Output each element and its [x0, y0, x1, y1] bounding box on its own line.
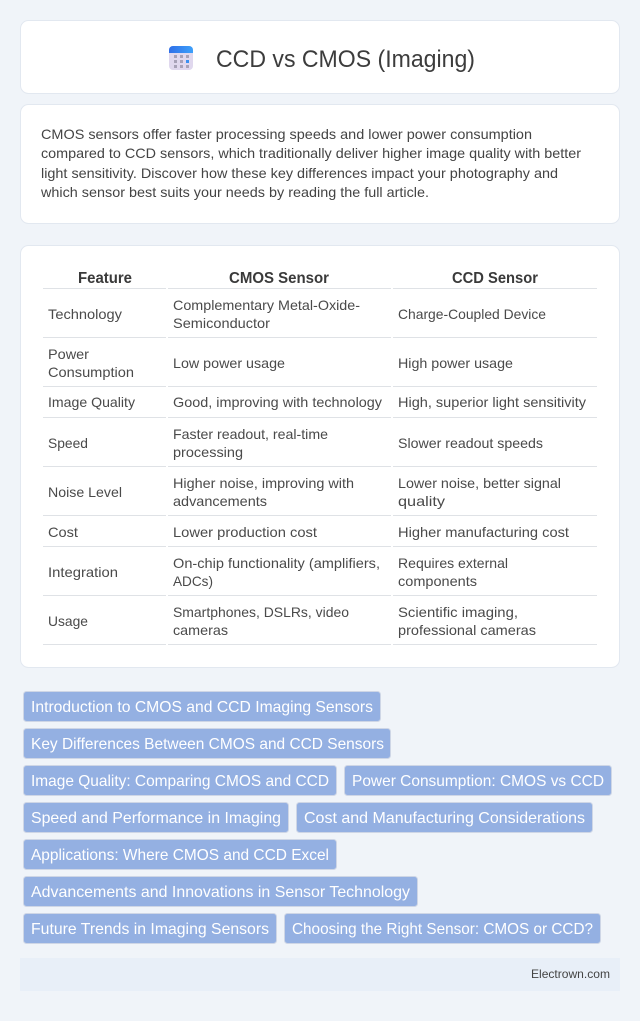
intro text: light sensitivity. Discover how these key differences impact your photography and: [41, 165, 558, 181]
row: noise level: quality: [398, 493, 445, 509]
intro text: which sensor best suits your needs by reading the full article.: [40, 184, 429, 200]
tag: future trends: Future Trends in Imaging Sensors: [31, 921, 269, 938]
intro text: compared to CCD sensors, which traditionally deliver higher image quality with better: [41, 145, 581, 161]
row: cost: [48, 524, 569, 540]
row: speed: processing: [173, 444, 243, 460]
tag: cost and manufacturing: [296, 802, 592, 832]
tag: applications: Applications: Where CMOS and CCD Excel: [31, 847, 329, 864]
row: technology: Complementary Metal-Oxide-: [173, 297, 360, 313]
row: technology: Charge-Coupled Device: [398, 306, 546, 322]
title: CCD vs CMOS (Imaging): [216, 46, 475, 73]
tag: speed and performance: [24, 802, 288, 832]
tag: choosing the right sensor: Choosing the Right Sensor: CMOS or CCD?: [292, 921, 593, 938]
tag: image quality: [24, 766, 336, 796]
row: cost: Lower production cost: [173, 524, 317, 540]
row: integration: On-chip functionality (amplifiers,: [173, 555, 380, 571]
panel: intro paragraph: [20, 104, 620, 224]
row: technology: Semiconductor: [173, 315, 270, 331]
row: usage: professional cameras: [398, 622, 536, 638]
row: integration: [48, 555, 508, 589]
row: cost: Higher manufacturing cost: [398, 524, 569, 540]
panel: comparison table: [20, 246, 620, 668]
table header row: [78, 270, 538, 287]
intro text: CMOS sensors offer faster processing speeds and lower power consumption: [41, 126, 532, 142]
row: noise level: [48, 475, 561, 509]
row: noise level: Noise Level: [48, 484, 122, 500]
row: power consumption: [48, 346, 513, 380]
tag: key differences: Key Differences Between CMOS and CCD Sensors: [31, 736, 384, 753]
row: usage: cameras: [173, 622, 228, 638]
table header row: CCD Sensor: [452, 270, 538, 287]
table header row: Feature: [78, 270, 132, 287]
row: integration: Integration: [48, 564, 118, 580]
row: integration: ADCs): [173, 573, 213, 589]
row: power consumption: Consumption: [48, 364, 134, 380]
row: power consumption: High power usage: [398, 355, 513, 371]
tag: speed and performance: Speed and Performance in Imaging: [31, 810, 281, 827]
row: technology: Technology: [48, 306, 122, 322]
tag: advancements: [24, 876, 418, 906]
row: image quality: [48, 394, 586, 410]
row: noise level: Higher noise, improving with: [173, 475, 354, 491]
tag: applications: [24, 840, 336, 870]
row: power consumption: Low power usage: [173, 355, 285, 371]
row: noise level: Lower noise, better signal: [398, 475, 561, 491]
row: integration: Requires external: [398, 555, 508, 571]
tag: key differences: [24, 728, 390, 758]
row: integration: components: [398, 573, 477, 589]
row: technology: [48, 297, 546, 331]
row: speed: Faster readout, real-time: [173, 426, 328, 442]
tag: introduction: [24, 692, 380, 722]
row: image quality: High, superior light sensitivity: [398, 394, 586, 410]
tag: cost and manufacturing: Cost and Manufacturing Considerations: [304, 810, 585, 827]
footer source text: Electrown.com: [531, 967, 610, 981]
tag: image quality: Image Quality: Comparing CMOS and CCD: [31, 773, 329, 790]
tag: introduction: Introduction to CMOS and CCD Imaging Sensors: [31, 699, 373, 716]
tag: power consumption: Power Consumption: CMOS vs CCD: [352, 773, 604, 790]
row: usage: Smartphones, DSLRs, video: [173, 604, 349, 620]
tag: choosing the right sensor: [284, 914, 600, 944]
tag: advancements: Advancements and Innovations in Sensor Technology: [31, 884, 410, 901]
footer: [20, 958, 620, 991]
row: speed: Speed: [48, 435, 88, 451]
row: power consumption: Power: [48, 346, 89, 362]
row: noise level: advancements: [173, 493, 267, 509]
row: usage: Usage: [48, 613, 88, 629]
tag: power consumption: [344, 766, 612, 796]
table header row: CMOS Sensor: [229, 270, 329, 287]
row: usage: Scientific imaging,: [398, 604, 518, 620]
panel: header: [20, 20, 620, 94]
intro text: [40, 126, 581, 200]
tag: future trends: [24, 914, 276, 944]
row: usage: [48, 604, 536, 638]
icon: calendar grid: [169, 46, 193, 70]
row: cost: Cost: [48, 524, 78, 540]
row: speed: Slower readout speeds: [398, 435, 543, 451]
row: speed: [48, 426, 543, 460]
panel: topic tags: [24, 692, 612, 944]
row: image quality: Image Quality: [48, 394, 135, 410]
row: image quality: Good, improving with technology: [173, 394, 382, 410]
